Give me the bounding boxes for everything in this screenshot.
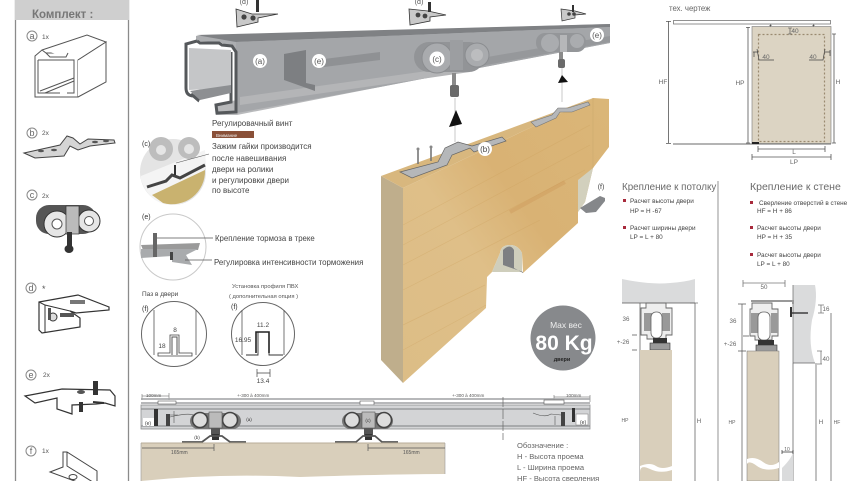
technical drawing xyxy=(659,4,841,166)
top bracket 1 xyxy=(236,0,278,27)
technical drawing: H xyxy=(836,79,841,86)
wall mount section: 10 xyxy=(784,447,790,453)
badge: max weight: двери xyxy=(554,357,570,363)
groove detail f: 18 xyxy=(158,343,166,350)
legend: Обозначение : xyxy=(517,441,568,450)
technical drawing: L xyxy=(792,149,796,156)
legend: L - Ширина проема xyxy=(517,463,585,472)
notes: adjustment screw: после навешивания xyxy=(212,154,286,163)
tech heading: тех. чертеж xyxy=(669,4,711,13)
heading: kit: Комплект : xyxy=(32,9,93,21)
detail c: (c) xyxy=(142,141,150,148)
ceiling mount section: HP xyxy=(622,418,629,424)
door dimensions: 165mm xyxy=(403,450,420,456)
bullets xyxy=(623,198,696,241)
top bracket 2 xyxy=(409,0,446,25)
PVC profile detail f: 11.2 xyxy=(257,322,269,329)
top bracket 3 xyxy=(561,5,586,21)
side elevation drawing: (e) xyxy=(145,421,151,427)
technical drawing: 40 xyxy=(762,54,770,61)
brakes xyxy=(154,409,158,426)
item c: roller carriage xyxy=(27,190,100,253)
PVC profile detail f: ( дополнительная опция ) xyxy=(229,294,298,300)
carriage left: (b) xyxy=(194,435,200,440)
groove detail f: Паз в двери xyxy=(142,291,179,298)
item e: brake xyxy=(25,370,115,414)
ceiling mount notes: Крепление к потолку xyxy=(622,182,716,193)
groove detail f xyxy=(142,291,206,366)
ceiling mount section: +-26 xyxy=(617,339,630,346)
bullets: Расчет высоты двери xyxy=(630,198,694,205)
ceiling mount section xyxy=(617,279,701,481)
dimensions row: +-300 à 400mm xyxy=(237,393,269,398)
bullets: Расчет ширины двери xyxy=(630,225,696,232)
hanger plate b front xyxy=(400,137,506,178)
wall mount notes: Крепление к стене xyxy=(750,181,841,193)
track front profile xyxy=(186,41,236,113)
item a: track: a xyxy=(29,31,35,41)
door dimensions: 165mm xyxy=(171,450,188,456)
badge: max weight: Max вес xyxy=(550,320,583,330)
track body xyxy=(196,24,610,115)
wall mount notes xyxy=(750,181,848,268)
technical drawing: LP xyxy=(790,159,798,166)
track bar xyxy=(141,405,590,429)
small roller xyxy=(536,33,586,52)
wall mount section: 50 xyxy=(761,284,768,291)
heading: kit xyxy=(15,0,129,21)
side elevation drawing xyxy=(141,393,590,481)
badge: max weight xyxy=(530,306,596,370)
carriage right xyxy=(335,412,398,442)
item a: track xyxy=(27,31,106,97)
wall mount notes: Расчет высоты двери xyxy=(757,252,821,259)
door dimensions xyxy=(142,444,445,456)
detail e xyxy=(140,214,363,280)
brake callouts xyxy=(214,234,363,267)
item e: brake: e xyxy=(28,370,34,380)
label: e xyxy=(312,54,326,68)
legend xyxy=(517,441,599,481)
notes: adjustment screw xyxy=(212,119,312,195)
brake inside track xyxy=(284,50,315,91)
label: e right xyxy=(590,28,604,42)
groove detail f: 8 xyxy=(173,327,177,334)
dimensions row xyxy=(142,393,590,402)
PVC profile detail f: 13.4 xyxy=(257,378,270,385)
carriage right: (c) xyxy=(365,418,371,423)
item d: ceiling bracket xyxy=(26,283,109,333)
technical drawing: HF xyxy=(659,79,667,86)
guide f: (f) xyxy=(598,184,604,191)
item e: brake: 2x xyxy=(43,372,51,379)
notes: adjustment screw: двери на ролики xyxy=(212,165,273,174)
side elevation drawing: (e) xyxy=(580,420,586,426)
wall mount notes: Расчет высоты двери xyxy=(757,225,821,232)
dimensions row: 100mm xyxy=(566,393,581,398)
PVC profile detail f xyxy=(229,284,299,385)
wall mount notes: Сверление отверстий в стене xyxy=(759,199,848,207)
ceiling mount section: 36 xyxy=(623,316,630,323)
notes: adjustment screw: Регулировачный винт xyxy=(212,119,293,128)
label: a xyxy=(253,54,267,68)
panel: kit contents xyxy=(15,0,129,481)
center cut line xyxy=(502,397,504,440)
large roller xyxy=(414,40,489,73)
notes: adjustment screw: по высоте xyxy=(212,186,250,195)
carriage left xyxy=(182,412,246,442)
door xyxy=(381,98,609,383)
item f: guide: 1x xyxy=(42,448,50,455)
upper bar xyxy=(141,399,590,403)
legend: H - Высота проема xyxy=(517,452,584,461)
door section xyxy=(141,443,445,481)
item c: roller carriage: c xyxy=(30,190,35,200)
wall mount section: +-26 xyxy=(724,341,737,348)
item b: hanger plate: b xyxy=(29,128,35,138)
main track illustration xyxy=(186,24,610,115)
adjustment bolts and arrows xyxy=(449,52,568,142)
item a: track: 1x xyxy=(42,34,50,41)
technical drawing: HP xyxy=(735,80,745,87)
wall mount section: H xyxy=(819,419,823,426)
notes: adjustment screw: и регулировки двери xyxy=(212,176,289,185)
brake callouts: Крепление тормоза в треке xyxy=(215,234,315,243)
PVC profile detail f: (f) xyxy=(231,304,238,311)
badge: max weight: 80 Kg xyxy=(535,332,593,355)
brake callouts: Регулировка интенсивности торможения xyxy=(214,258,363,267)
hanger plate b front: (b) xyxy=(480,145,490,154)
label: a: (a) xyxy=(255,57,265,66)
wall mount section: 16 xyxy=(823,306,830,313)
notes: adjustment screw: Зажим гайки производится xyxy=(212,142,312,151)
item b: hanger plate: 2x xyxy=(42,130,50,137)
wall mount section xyxy=(724,280,840,481)
label: e right: (e) xyxy=(592,31,602,40)
guide f xyxy=(580,184,605,213)
dimensions row: +-300 à 400mm xyxy=(452,393,484,398)
wall mount notes: LP = L + 80 xyxy=(757,261,790,268)
detail e: (e) xyxy=(142,214,151,221)
wall mount section: HP xyxy=(729,420,736,426)
item d: ceiling bracket: d xyxy=(28,283,34,293)
technical drawing: 40 xyxy=(809,54,817,61)
PVC profile detail f: 16.95 xyxy=(235,337,252,344)
wall mount notes: HF = H + 86 xyxy=(757,208,792,215)
item f: guide xyxy=(26,446,97,481)
ceiling carriage xyxy=(641,303,672,350)
ceiling mount notes xyxy=(622,182,716,241)
attention tag: Внимание xyxy=(216,133,238,138)
bullets: LP = L + 80 xyxy=(630,234,663,241)
groove detail f: (f) xyxy=(142,306,149,313)
item c: roller carriage: 2x xyxy=(42,193,50,200)
PVC profile detail f: Установка профиля ПВХ xyxy=(232,284,299,290)
label: e: (e) xyxy=(314,57,324,66)
item f: guide: f xyxy=(30,446,33,456)
wall mount section: 40 xyxy=(823,356,830,363)
technical drawing: 40 xyxy=(791,28,799,35)
wall carriage xyxy=(750,303,778,352)
dimensions row: 100mm xyxy=(146,393,161,398)
hanger plate b back xyxy=(531,102,590,127)
side elevation drawing: (a) xyxy=(246,417,252,422)
wall mount notes: HP = H + 35 xyxy=(757,234,792,241)
detail c xyxy=(140,137,209,205)
ceiling mount section: H xyxy=(697,418,701,425)
bullets: HP = H -67 xyxy=(630,208,662,215)
item d: ceiling bracket: * xyxy=(42,284,46,294)
wall mount section: HF xyxy=(834,420,840,426)
large roller: (c) xyxy=(432,55,442,64)
item b: hanger plate xyxy=(24,128,115,158)
wall mount section: 36 xyxy=(730,318,737,325)
